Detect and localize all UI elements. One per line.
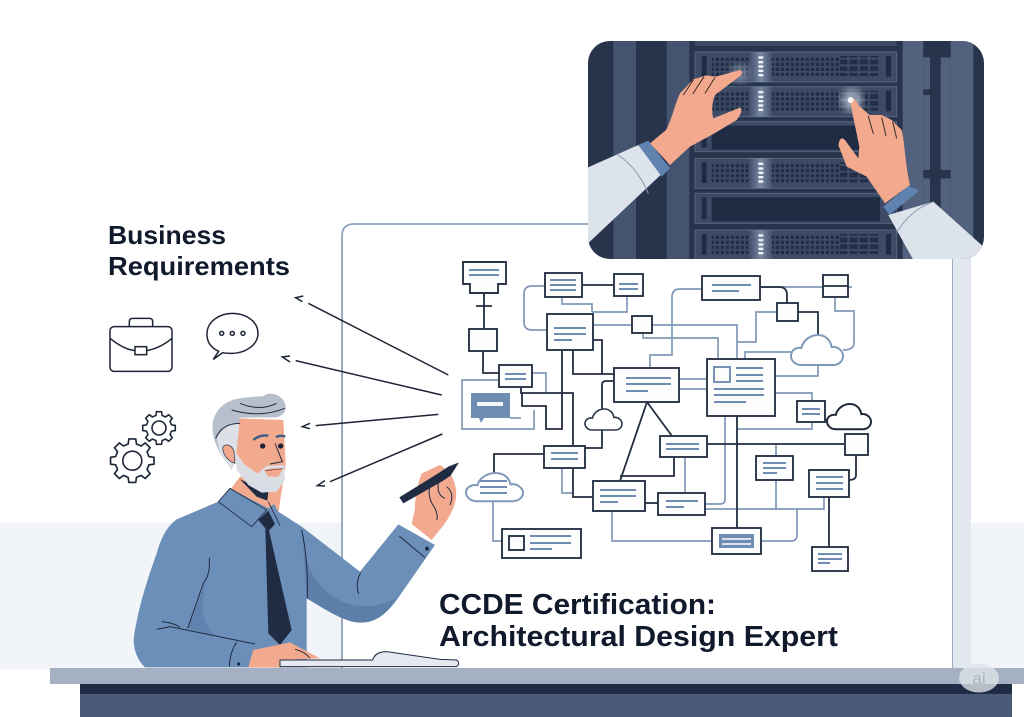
desk hand xyxy=(248,642,320,667)
hair xyxy=(212,394,286,470)
connectors: light blue xyxy=(462,286,854,541)
tie xyxy=(258,511,292,645)
clouds xyxy=(466,335,871,501)
floor band xyxy=(0,523,1024,669)
shirt shading xyxy=(302,527,397,623)
ear xyxy=(223,445,235,463)
shirt xyxy=(134,488,435,667)
beard xyxy=(235,452,285,493)
main title xyxy=(439,589,838,653)
ai badge: ai xyxy=(972,669,986,688)
box text lines xyxy=(469,270,843,563)
network diagram xyxy=(462,262,871,571)
presenter figure xyxy=(134,394,459,667)
server rack photo panel xyxy=(588,41,984,259)
connectors: dark xyxy=(476,285,856,547)
desk xyxy=(50,668,1024,717)
shirt fold lines xyxy=(157,530,425,667)
heading: business requirements xyxy=(108,220,290,281)
icon: gears xyxy=(111,412,175,482)
left sleeve xyxy=(588,145,662,243)
right cuff xyxy=(883,186,919,215)
main title: CCDE Certification: xyxy=(439,589,716,621)
raised hand xyxy=(412,465,456,540)
head xyxy=(233,418,286,492)
icon: briefcase xyxy=(110,318,172,371)
neck skin xyxy=(230,477,283,513)
eyes and brows xyxy=(260,443,265,449)
neck shadow xyxy=(240,479,268,501)
open book xyxy=(280,652,459,667)
collar xyxy=(218,488,280,527)
diagram boxes xyxy=(463,262,868,571)
heading: business requirements: Business xyxy=(108,220,226,250)
whiteboard xyxy=(342,224,971,669)
chat panel icon xyxy=(471,393,510,423)
left hand xyxy=(650,70,742,165)
left cuff xyxy=(638,141,670,177)
arrows from diagram to requirements xyxy=(282,296,448,486)
ai badge xyxy=(959,664,999,692)
icon: speech bubble xyxy=(207,313,258,359)
heading: business requirements: Requirements xyxy=(108,251,290,281)
main title: Architectural Design Expert xyxy=(439,621,838,653)
right sleeve xyxy=(888,202,983,260)
right hand xyxy=(838,98,910,203)
pen xyxy=(399,462,459,503)
